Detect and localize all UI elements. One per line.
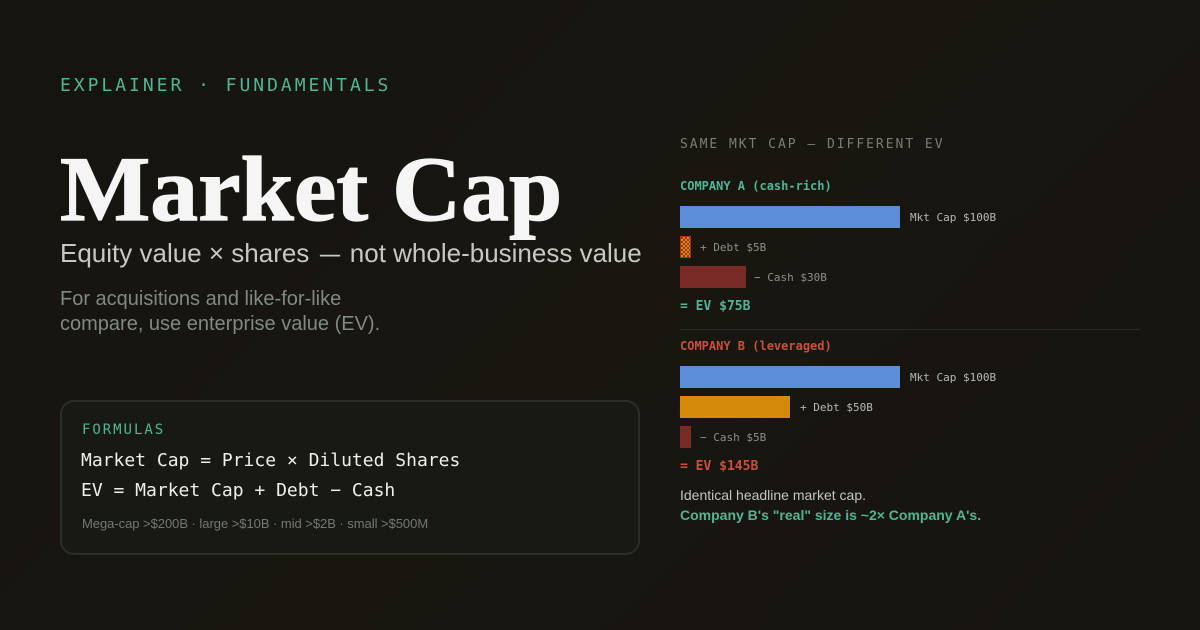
company B heading: COMPANY B (leveraged) [680,339,832,353]
formula: market cap: Market Cap = Price × Diluted Shares [81,450,460,471]
label: market cap A: Mkt Cap $100B [910,211,996,224]
bar: debt B [680,396,790,418]
takeaway: Identical headline market cap. [680,487,866,503]
EV total B: = EV $145B [680,459,758,474]
label: cash A: − Cash $30B [754,271,827,284]
bar: debt A [680,236,691,258]
label: debt B: + Debt $50B [800,401,873,414]
panel: formulas [60,400,640,555]
bar: cash A [680,266,746,288]
label: cash B: − Cash $5B [700,431,766,444]
takeaway: Company B's "real" size is ~2× Company A's. [680,507,981,523]
bar: market cap A [680,206,900,228]
bar: market cap B [680,366,900,388]
description: compare, use enterprise value (EV). [60,313,380,335]
panel: company A [680,179,996,314]
label: debt A: + Debt $5B [700,241,766,254]
market cap size tiers: Mega-cap >$200B · large >$10B · mid >$2B · small >$500M [82,516,428,531]
divider [680,329,1140,330]
subtitle: Equity value × shares not whole-business value [60,238,642,268]
subtitle: — [319,238,340,268]
panel: company B [680,339,996,474]
bar: cash B [680,426,691,448]
description: For acquisitions and like-for-like [60,288,341,310]
eyebrow label: EXPLAINER · FUNDAMENTALS [60,75,391,96]
formulas heading: FORMULAS [82,422,165,438]
EV total A: = EV $75B [680,299,750,314]
chart heading: SAME MKT CAP — DIFFERENT EV [680,137,945,152]
title: Market Cap [60,138,562,240]
formula: enterprise value: EV = Market Cap + Debt − Cash [81,480,395,501]
company A heading: COMPANY A (cash-rich) [680,179,832,193]
takeaway [680,487,981,523]
label: market cap B: Mkt Cap $100B [910,371,996,384]
description [60,288,380,335]
